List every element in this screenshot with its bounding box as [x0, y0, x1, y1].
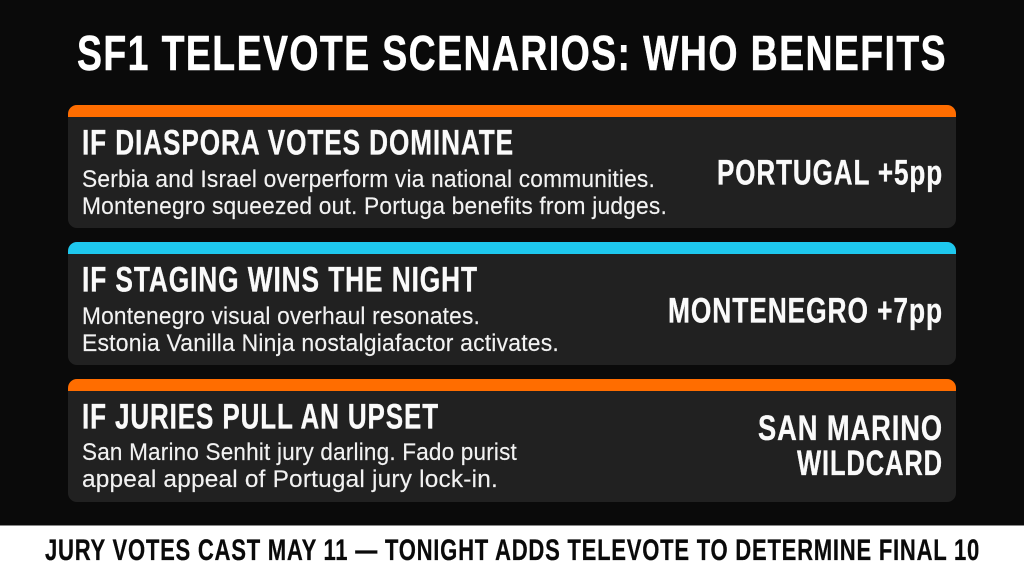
panel: diaspora votes scenario: [68, 105, 956, 228]
panel result: WILDCARD: [797, 444, 943, 483]
panel description: Serbia and Israel overperform via national communities.: [82, 166, 655, 193]
panel description: Montenegro squeezed out. Portuga benefits from judges.: [82, 193, 667, 220]
panel description: [82, 166, 667, 220]
panel: juries upset scenario: [68, 379, 956, 502]
panel result: MONTENEGRO +7pp: [668, 292, 943, 330]
panel heading: IF JURIES PULL AN UPSET: [82, 398, 439, 436]
panel description: [82, 439, 517, 493]
panel description: San Marino Senhit jury darling. Fado purist: [82, 439, 517, 466]
panel result: [758, 409, 943, 483]
panel result: PORTUGAL +5pp: [717, 154, 943, 192]
panel description: Estonia Vanilla Ninja nostalgiafactor activates.: [82, 330, 559, 357]
panel description: Montenegro visual overhaul resonates.: [82, 303, 480, 330]
panel accent bar: cyan: [68, 242, 956, 254]
panel heading: IF STAGING WINS THE NIGHT: [82, 260, 478, 300]
panel heading: IF DIASPORA VOTES DOMINATE: [82, 124, 514, 162]
panel accent bar: orange: [68, 379, 956, 391]
panel accent bar: orange: [68, 105, 956, 117]
footer banner: [0, 525, 1024, 572]
panel result: SAN MARINO: [758, 409, 943, 448]
panel: staging scenario: [68, 242, 956, 365]
panel description: appeal appeal of Portugal jury lock-in.: [82, 466, 498, 493]
panel description: [82, 303, 559, 357]
